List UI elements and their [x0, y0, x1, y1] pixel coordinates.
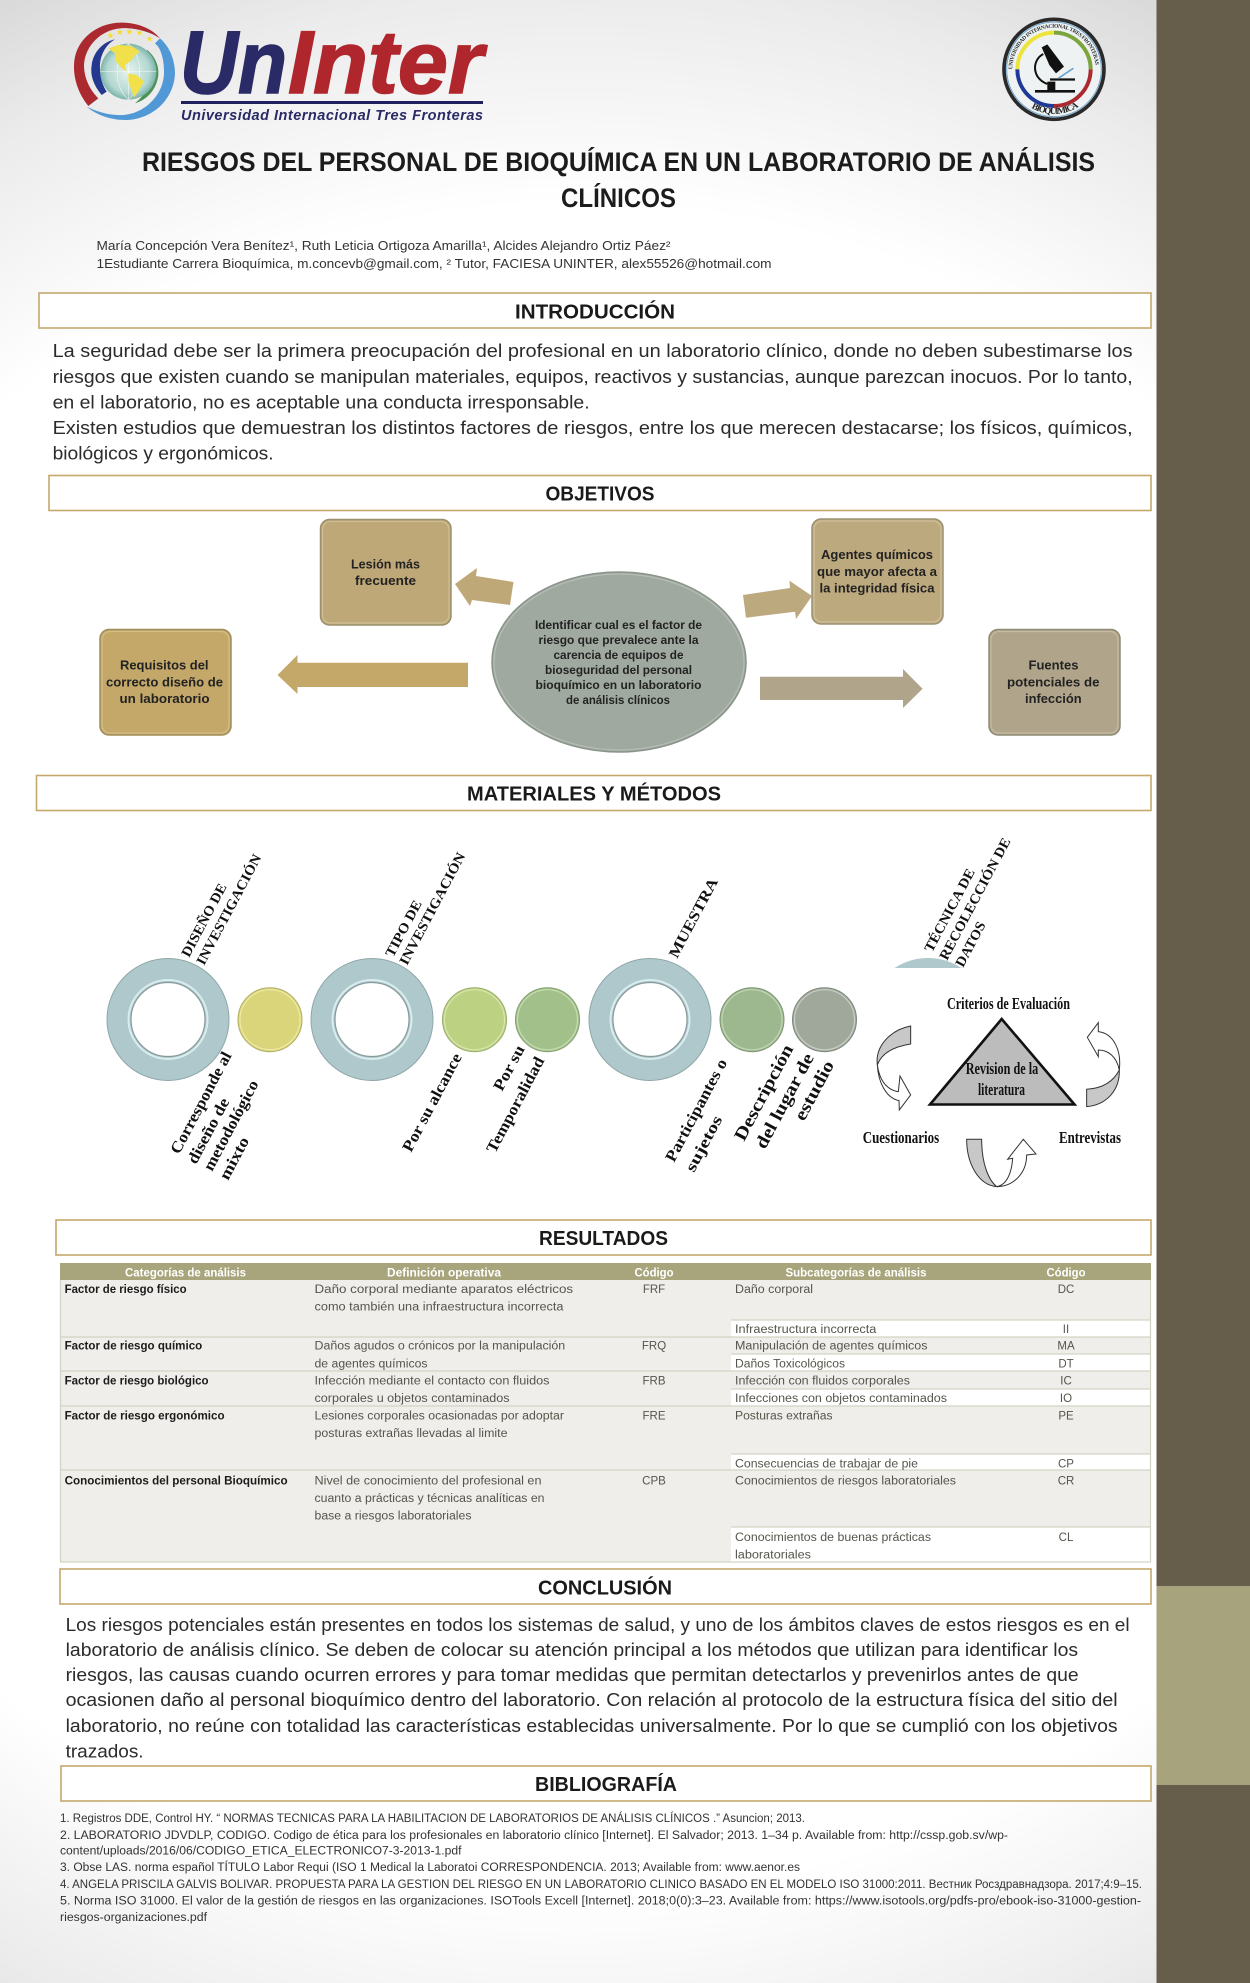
ring: diseño: [107, 958, 229, 1080]
column: subcategorías: laboratoriales: [735, 1549, 811, 1561]
text: introducción: riesgos que existen cuando se manipulan materiales, equipos, reactivos y sustancias, aunque parezcan inocuos. Por lo tanto,: [53, 366, 1133, 387]
logo: UnInter: [74, 12, 487, 124]
column: definición: Infección mediante el contacto con fluidos: [314, 1375, 550, 1387]
central ellipse: bioquímico en un laboratorio: [536, 678, 702, 692]
heading: Introducción: INTRODUCCIÓN: [515, 300, 675, 324]
labels: top: TÉCNICA DE: [921, 866, 979, 955]
labels: bottom: [168, 1041, 838, 1183]
text: introducción: Existen estudios que demuestran los distintos factores de riesgos, entre los que merecen destacarse; los físicos, químicos,: [53, 417, 1133, 438]
title: CLÍNICOS: [561, 183, 676, 213]
labels: bottom: metodológico: [201, 1078, 262, 1174]
table: resultados: [60, 1263, 1151, 1562]
table header: Definición operativa: [387, 1266, 501, 1280]
column: código sub: IO: [1060, 1393, 1072, 1405]
box: requisitos: Requisitos del: [120, 658, 208, 672]
labels: bottom: mixto: [217, 1134, 253, 1183]
text: introducción: biológicos y ergonómicos.: [53, 442, 274, 464]
icon: globe emblem: [74, 23, 175, 120]
authors: María Concepción Vera Benítez¹, Ruth Leticia Ortigoza Amarilla¹, Alcides Alejandro Ortiz Páez²: [96, 238, 671, 253]
column: subcategorías: Daños Toxicológicos: [735, 1358, 845, 1370]
text: introducción: en el laboratorio, no es aceptable una conducta irresponsable.: [53, 392, 590, 412]
heading: Bibliografía: BIBLIOGRAFÍA: [535, 1773, 677, 1796]
column: código: FRQ: [642, 1341, 666, 1353]
column: subcategorías: Infraestructura incorrecta: [735, 1324, 877, 1336]
central ellipse: bioseguridad del personal: [545, 663, 692, 677]
logo: Bioquímica seal: BIOQUÍMICA: [1031, 102, 1079, 116]
column: código sub: CL: [1059, 1532, 1074, 1544]
references: 5. Norma ISO 31000. El valor de la gestión de riesgos en las organizaciones. ISOTools Excell [Internet]. 2018;0(0):3–23. Available from: https://www.isotools.org/pdfs-pro/ebook-iso-31000-gestion-: [60, 1896, 1141, 1908]
column: código: FRE: [642, 1411, 666, 1423]
column: subcategorías: Infección con fluidos corporales: [735, 1375, 910, 1387]
column: código sub: MA: [1057, 1341, 1075, 1353]
column: código sub: PE: [1058, 1411, 1074, 1423]
labels: bottom: Descripción: [730, 1041, 797, 1144]
column: subcategorías: Daño corporal: [735, 1284, 813, 1296]
title: RIESGOS DEL PERSONAL DE BIOQUÍMICA EN UN LABORATORIO DE ANÁLISIS: [142, 147, 1095, 177]
column: subcategorías: Conocimientos de riesgos laboratoriales: [735, 1475, 956, 1487]
heading: Conclusión: [60, 1569, 1151, 1604]
table header: Código: [1046, 1266, 1086, 1280]
column: código sub: [1057, 1284, 1075, 1544]
icon: globe emblem: ★: [107, 30, 115, 40]
triangle labels: [863, 994, 1121, 1147]
heading: Resultados: [56, 1220, 1151, 1255]
box: agentes: [812, 519, 943, 624]
references: 3. Obse LAS. norma español TÍTULO Labor Requi (ISO 1 Medical la Laboratoi CORRESPONDENCIA. 2013; Available from: www.aenor.es: [60, 1861, 800, 1874]
column: código: [642, 1284, 666, 1487]
text: conclusión: ocasionen daño al personal bioquímico dentro del laboratorio. Con relación al protocolo de la estructura física del sitio del: [66, 1689, 1118, 1710]
box: requisitos: [100, 630, 231, 735]
box: agentes: Agentes químicos: [821, 547, 933, 562]
logo wordmark: [180, 12, 487, 124]
logo wordmark: Un: [180, 12, 287, 112]
white sub rows: [731, 1320, 1151, 1562]
table header: Código: [634, 1266, 674, 1280]
central ellipse: de análisis clínicos: [566, 693, 670, 707]
table header: Subcategorías de análisis: [786, 1266, 927, 1280]
icon: globe emblem: ★: [116, 27, 124, 37]
ring: muestra: [589, 958, 711, 1080]
labels: bottom: del lugar de: [751, 1050, 818, 1152]
column: subcategorías: Consecuencias de trabajar de pie: [735, 1458, 918, 1470]
arrow: to fuentes: [760, 669, 923, 708]
column: definición: [314, 1284, 573, 1523]
circle: gray: [792, 988, 856, 1052]
references: content/uploads/2016/06/CODIGO_ETICA_ELECTRONICO7-3-2013-1.pdf: [60, 1846, 462, 1858]
column: código sub: DC: [1058, 1284, 1074, 1296]
labels: bottom: estudio: [790, 1057, 838, 1124]
triangle labels: Cuestionarios: [863, 1128, 939, 1147]
column: subcategorías: Conocimientos de buenas prácticas: [735, 1532, 931, 1544]
box: fuentes: Fuentes: [1028, 658, 1078, 672]
authors: 1Estudiante Carrera Bioquímica, m.concevb@gmail.com, ² Tutor, FACIESA UNINTER, alex55526@hotmail.com: [96, 256, 772, 271]
box: agentes: que mayor afecta a: [817, 564, 938, 579]
references: 1. Registros DDE, Control HY. “ NORMAS TECNICAS PARA LA HABILITACION DE LABORATORIOS DE ANÁLISIS CLÍNICOS .” Asuncion; 2013.: [60, 1812, 805, 1825]
text: introducción: La seguridad debe ser la primera preocupación del profesional en un laboratorio clínico, donde no deben subestimarse los: [53, 340, 1133, 361]
labels: bottom: Temporalidad: [484, 1054, 548, 1156]
sidebar: [1156, 0, 1250, 1983]
column: subcategorías: Posturas extrañas: [735, 1411, 833, 1423]
column: código: FRF: [643, 1284, 665, 1296]
column: código sub: DT: [1058, 1358, 1074, 1370]
labels: bottom: Corresponde al: [168, 1049, 236, 1157]
column: definición: cuanto a prácticas y técnicas analíticas en: [314, 1493, 544, 1505]
ring: tipo: [311, 958, 433, 1080]
triangle labels: Entrevistas: [1059, 1128, 1121, 1147]
text: conclusión: laboratorio, no reúne con totalidad las características establecidas universalmente. Por lo que se cumplió con los objetivos: [66, 1715, 1118, 1736]
clipped ring: técnica: [894, 958, 962, 968]
column: código: FRB: [642, 1375, 666, 1387]
table header: [60, 1263, 1151, 1280]
labels: bottom: diseño de: [185, 1095, 233, 1167]
triangle labels: Criterios de Evaluación: [947, 994, 1070, 1013]
labels: top: RECOLECCIÓN DE: [936, 835, 1014, 963]
box: requisitos: un laboratorio: [120, 691, 210, 706]
column: subcategorías: [735, 1284, 956, 1561]
heading: Materiales y métodos: MATERIALES Y MÉTODOS: [467, 782, 721, 806]
column: definición: corporales u objetos contaminados: [314, 1393, 510, 1405]
arrows: cycle: [877, 1023, 1120, 1187]
logo wordmark: Inter: [288, 12, 487, 112]
diagram: objetivos: [100, 519, 1120, 752]
column: definición: de agentes químicos: [314, 1358, 428, 1370]
box: agentes: la integridad física: [820, 580, 935, 596]
circle: yellow: [238, 988, 302, 1052]
column: categorías: [65, 1284, 288, 1487]
arrow: to requisitos: [278, 655, 468, 694]
title: [142, 147, 1095, 213]
diagram: metodología: [56, 835, 1151, 1924]
column: categorías: Factor de riesgo ergonómico: [65, 1411, 225, 1423]
icon: globe emblem: ★: [146, 33, 154, 43]
column: subcategorías: Infecciones con objetos contaminados: [735, 1393, 947, 1405]
column: definición: posturas extrañas llevadas al limite: [314, 1428, 508, 1440]
column: categorías: Factor de riesgo químico: [65, 1341, 202, 1353]
arrow: to agentes: [743, 581, 812, 619]
column: código sub: CR: [1058, 1475, 1074, 1487]
heading: Resultados: RESULTADOS: [539, 1228, 668, 1250]
box: lesión: [320, 520, 451, 625]
arrow: to lesión: [455, 568, 514, 606]
labels: top: [177, 835, 1014, 970]
icon: globe emblem: ★: [136, 28, 144, 38]
references: 4. ANGELA PRISCILA GALVIS BOLIVAR. PROPUESTA PARA LA GESTION DEL RIESGO EN UN LABORATORIO CLINICO BASADO EN EL MODELO ISO 31000:2011. Вестник Росздравнадзора. 2017;4:9–15.: [60, 1879, 1142, 1891]
logo: Bioquímica seal: UNIVERSIDAD INTERNACIONAL TRES FRONTERAS: [1008, 24, 1099, 70]
references: 2. LABORATORIO JDVDLP, CODIGO. Codigo de ética para los profesionales en laboratorio clínico [Internet]. El Salvador; 2013. 1–34 p. Available from: http://cssp.gob.sv/wp-: [60, 1830, 1008, 1842]
column: definición: Lesiones corporales ocasionadas por adoptar: [314, 1411, 564, 1423]
text: conclusión: Los riesgos potenciales están presentes en todos los sistemas de salud, y uno de los ámbitos claves de estos riesgos es en el: [66, 1614, 1130, 1635]
labels: top: DISEÑO DE: [177, 880, 231, 960]
box: fuentes: potenciales de: [1007, 674, 1100, 690]
text: conclusión: riesgos, las causas cuando ocurren errores y para tomar medidas que permitan detectarlos y prevenirlos antes de que: [66, 1664, 1079, 1685]
box: lesión: frecuente: [355, 573, 416, 588]
authors: [96, 238, 772, 271]
column: definición: Nivel de conocimiento del profesional en: [314, 1475, 542, 1487]
column: definición: base a riesgos laboratoriales: [314, 1511, 472, 1523]
heading: Bibliografía: [61, 1766, 1151, 1801]
circle: light green: [442, 988, 506, 1052]
box: fuentes: [989, 630, 1120, 735]
heading: Conclusión: CONCLUSIÓN: [538, 1576, 672, 1600]
central ellipse: carencia de equipos de: [554, 648, 684, 662]
column: definición: Daños agudos o crónicos por la manipulación: [314, 1341, 565, 1353]
box: requisitos: correcto diseño de: [106, 674, 223, 690]
box: fuentes: infección: [1025, 691, 1082, 706]
column: definición: Daño corporal mediante aparatos eléctricos: [314, 1284, 573, 1296]
column: código: CPB: [642, 1475, 666, 1487]
text: conclusión: trazados.: [66, 1740, 144, 1762]
triangle diagram: [863, 994, 1121, 1187]
labels: bottom: Participantes o: [663, 1056, 731, 1165]
central ellipse: Identificar cual es el factor de: [535, 618, 702, 632]
column: código sub: II: [1063, 1324, 1069, 1336]
text: introducción: [53, 340, 1133, 464]
column: categorías: Factor de riesgo físico: [65, 1284, 187, 1296]
circle: sage: [720, 988, 784, 1052]
column: categorías: Factor de riesgo biológico: [65, 1375, 209, 1387]
column: código sub: CP: [1058, 1458, 1074, 1470]
central ellipse: [492, 572, 746, 752]
references: riesgos-organizaciones.pdf: [60, 1912, 208, 1924]
text: conclusión: laboratorio de análisis clínico. Se deben de colocar su atención principal a los métodos que utilizan para identificar los: [66, 1639, 1078, 1660]
labels: bottom: Por su: [491, 1043, 529, 1094]
icon: globe emblem: ★: [126, 26, 134, 36]
column: definición: como también una infraestructura incorrecta: [314, 1301, 564, 1313]
triangle labels: Revision de la: [966, 1059, 1039, 1078]
labels: bottom: sujetos: [683, 1113, 726, 1175]
heading: Objetivos: [49, 476, 1151, 510]
text: conclusión: [66, 1614, 1130, 1762]
labels: top: INVESTIGACIÓN: [396, 850, 469, 968]
labels: bottom: Por su alcance: [400, 1051, 466, 1155]
labels: top: DATOS: [953, 919, 990, 970]
labels: top: MUESTRA: [666, 876, 722, 961]
labels: top: INVESTIGACIÓN: [193, 851, 265, 968]
column: subcategorías: Manipulación de agentes químicos: [735, 1341, 928, 1353]
column: categorías: Conocimientos del personal Bioquímico: [65, 1475, 288, 1487]
central ellipse: riesgo que prevalece ante la: [538, 633, 699, 647]
heading: Introducción: [39, 293, 1151, 328]
logo wordmark: Universidad Internacional Tres Fronteras: [181, 108, 483, 124]
box: lesión: Lesión más: [351, 556, 420, 572]
column: código sub: IC: [1060, 1375, 1072, 1387]
circle: green: [516, 988, 580, 1052]
logo: Bioquímica seal: [1002, 18, 1106, 122]
heading: Objetivos: OBJETIVOS: [546, 484, 654, 506]
triangle labels: literatura: [978, 1080, 1025, 1099]
table header: Categorías de análisis: [125, 1266, 246, 1280]
icon: microscope: [1035, 44, 1075, 93]
references: [60, 1812, 1142, 1924]
triangle: [930, 1019, 1074, 1104]
heading: Materiales y métodos: [36, 776, 1151, 810]
labels: top: TIPO DE: [383, 898, 426, 960]
